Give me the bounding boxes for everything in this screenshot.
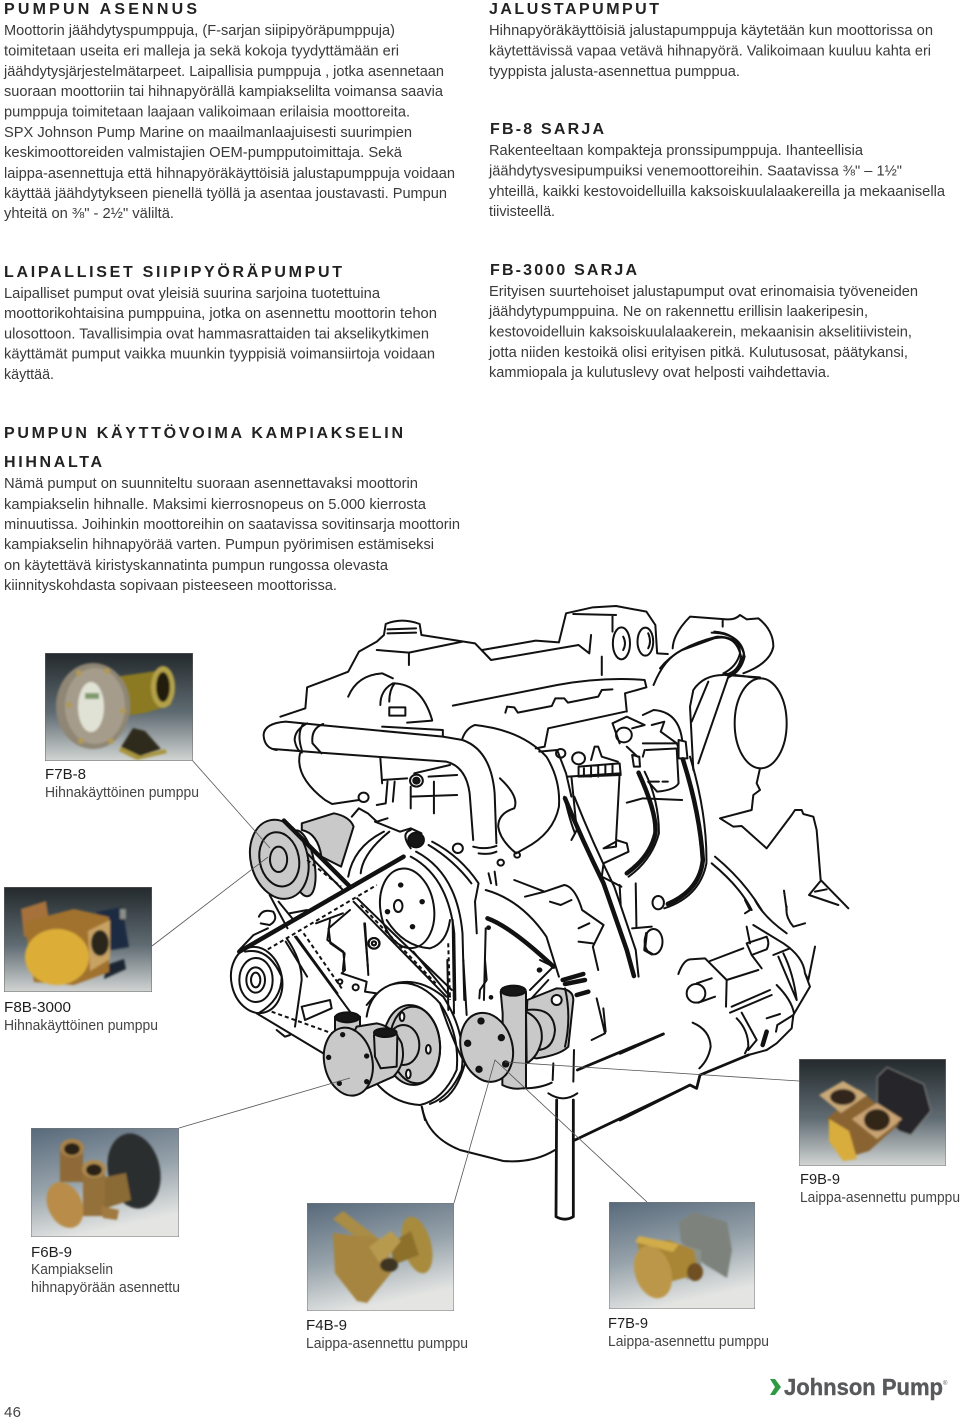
caption: F8B-3000 bbox=[4, 1000, 158, 1034]
caption: F6B-9: hihnapyörään asennettu bbox=[31, 1280, 180, 1296]
text block: pumpun käyttövoima: Nämä pumput on suunniteltu suoraan asennettavaksi moottorin bbox=[4, 476, 418, 492]
photo: F8B-3000 pump bbox=[4, 887, 152, 992]
section: laipalliset siipipyöräpumput bbox=[4, 262, 437, 383]
caption: F9B-9 bbox=[800, 1172, 960, 1206]
text block: pumpun asennus: toimitetaan useita eri malleja ja sekä kokoja tyydyttämään eri bbox=[4, 44, 399, 60]
heading: laipalliset siipipyöräpumput: LAIPALLISET SIIPIPYÖRÄPUMPUT bbox=[4, 262, 342, 281]
text block: laipalliset siipipyöräpumput: ulosottoon. Tavallisimpia ovat hammasrattaiden tai akselikytkimen bbox=[4, 326, 429, 342]
text block: pumpun asennus: käyttää jäähdytykseen pienellä työllä ja asentaa joustavasti. Pumpun bbox=[4, 186, 447, 202]
text block: laipalliset siipipyöräpumput bbox=[4, 286, 437, 383]
engine fuel filter and hoses bbox=[539, 710, 706, 977]
heading: pumpun käyttövoima kampiakselin hihnalta: PUMPUN KÄYTTÖVOIMA KAMPIAKSELIN bbox=[4, 423, 403, 442]
photo: F9B-9 pump bbox=[799, 1059, 946, 1166]
caption: F6B-9: Kampiakselin bbox=[31, 1262, 113, 1278]
caption: F7B-8 bbox=[45, 767, 199, 801]
text block: fb-3000 sarja: jotta niiden kestoikä olisi erityisen pitkä. Kulutusosat, päätykansi, bbox=[488, 345, 908, 361]
section: fb-3000 sarja bbox=[488, 262, 918, 381]
engine lower belt and crank pulleys bbox=[225, 920, 463, 1120]
section: jalustapumput bbox=[489, 1, 933, 80]
text block: fb-8 sarja: Rakenteeltaan kompakteja pronssipumppuja. Ihanteellisia bbox=[489, 143, 864, 159]
text block: laipalliset siipipyöräpumput: käyttämät pumput vaikka muunkin tyyppisiä voimansiirtoja voidaan bbox=[4, 346, 435, 362]
heading: pumpun asennus: PUMPUN ASENNUS bbox=[4, 1, 197, 18]
caption: F7B-8: Hihnakäyttöinen pumppu bbox=[45, 785, 199, 801]
engine line drawing bbox=[225, 606, 848, 1219]
section: pumpun asennus bbox=[3, 1, 455, 222]
text block: fb-3000 sarja: kestovoidelluin kaksoiskuulalaakerein, mekaanisin akselitiivistein, bbox=[489, 324, 912, 340]
text block: jalustapumput: Hihnapyöräkäyttöisiä jalustapumppuja käytetään kun moottorissa on bbox=[489, 23, 933, 39]
text block: fb-3000 sarja: jäähdytypumppuina. Ne on rakennettu erillisin laakeripesin, bbox=[488, 304, 868, 320]
leader lines bbox=[152, 760, 799, 1203]
photo: F4B-9 pump bbox=[307, 1203, 454, 1311]
text block: pumpun asennus: SPX Johnson Pump Marine on maailmanlaajuisesti suurimpien bbox=[4, 125, 412, 141]
engine flywheel section bbox=[620, 900, 815, 1120]
text block: pumpun käyttövoima: minuutissa. Joihinkin moottoreihin on saatavissa sovitinsarja moottorin bbox=[4, 517, 460, 533]
text block: laipalliset siipipyöräpumput: moottorikohtaisina pumppuina, jotka on asennettu moottorin tehon bbox=[4, 306, 437, 322]
text block: fb-3000 sarja: Erityisen suurtehoiset jalustapumput ovat erinomaisia työveneiden bbox=[489, 284, 918, 300]
photo: F7B-9 pump bbox=[609, 1202, 755, 1309]
caption: F7B-9: Laippa-asennettu pumppu bbox=[608, 1334, 769, 1350]
engine right pump and oil pan bbox=[422, 960, 680, 1219]
caption: F7B-9: F7B-9 bbox=[608, 1316, 648, 1332]
text block: pumpun asennus: pumppuja toimitetaan laajaan valikoimaan erilaisia moottoreita. bbox=[4, 104, 410, 120]
photo: F6B-9 pump bbox=[31, 1128, 179, 1237]
caption: F8B-3000: F8B-3000 bbox=[4, 1000, 71, 1016]
text block: pumpun asennus: suoraan moottoriin tai hihnapyörällä kampiakselilta voimansa saavia bbox=[4, 84, 444, 100]
caption: F8B-3000: Hihnakäyttöinen pumppu bbox=[4, 1018, 158, 1034]
section: pumpun käyttövoima kampiakselin hihnalta bbox=[4, 423, 460, 594]
heading: pumpun käyttövoima kampiakselin hihnalta: HIHNALTA bbox=[4, 454, 102, 471]
heading: pumpun käyttövoima kampiakselin hihnalta bbox=[4, 423, 403, 471]
text block: fb-3000 sarja: kammiopala ja kulutuslevy ovat helposti vaihdettavia. bbox=[489, 365, 830, 381]
caption: F9B-9: F9B-9 bbox=[800, 1172, 840, 1188]
registered mark: ® bbox=[943, 1380, 948, 1387]
text block: pumpun käyttövoima: kampiakselin hihnalle. Maksimi kierrosnopeus on 5.000 kierrosta bbox=[4, 497, 427, 513]
text block: pumpun asennus: keskimoottoreiden valmistajien OEM-pumpputoimittaja. Sekä bbox=[4, 145, 403, 161]
logo wordmark: Johnson Pump bbox=[784, 1374, 943, 1400]
text block: jalustapumput: tyyppista jalusta-asennettua pumppua. bbox=[489, 64, 740, 80]
engine upper section bbox=[239, 606, 760, 1000]
heading: fb-3000 sarja: FB-3000 SARJA bbox=[490, 262, 637, 279]
caption: F6B-9 bbox=[31, 1245, 180, 1296]
text block: pumpun käyttövoima bbox=[4, 476, 460, 594]
text block: fb-8 sarja: yhteillä, kaikki kestovoidelluilla kaksoiskuulalaakereilla ja mekaanisella bbox=[489, 184, 946, 200]
section: fb-8 sarja bbox=[488, 121, 946, 220]
text block: pumpun käyttövoima: kiinnityskohdasta sopivaan pisteeseen moottorissa. bbox=[4, 578, 337, 594]
caption: F7B-8: F7B-8 bbox=[45, 767, 86, 783]
icon: green chevron bbox=[770, 1379, 781, 1395]
photo: F7B-8 pump bbox=[45, 653, 193, 761]
text block: jalustapumput: käytettävissä vapaa vetävä hihnapyörä. Valikoimaan kuuluu kahta eri bbox=[489, 44, 931, 60]
text block: fb-8 sarja: tiivisteellä. bbox=[489, 204, 555, 220]
text block: pumpun asennus: Moottorin jäähdytyspumppuja, (F-sarjan siipipyöräpumppuja) bbox=[4, 23, 395, 39]
logo: Johnson Pump bbox=[770, 1374, 948, 1400]
text block: pumpun asennus: jäähdytysjärjestelmätarpeet. Laipallisia pumppuja , jotka asennetaan bbox=[3, 64, 444, 80]
engine right section bbox=[660, 615, 848, 910]
text block: pumpun asennus bbox=[3, 23, 455, 222]
text block: pumpun asennus: yhteitä on ⅜" - 2½" väliltä. bbox=[4, 206, 174, 222]
caption: F6B-9: F6B-9 bbox=[31, 1245, 72, 1261]
text block: pumpun käyttövoima: kampiakselin hihnapyörää varten. Pumpun pyörimisen estämiseksi bbox=[4, 537, 434, 553]
text block: fb-8 sarja bbox=[488, 143, 946, 220]
caption: F4B-9: F4B-9 bbox=[306, 1318, 347, 1334]
text block: pumpun asennus: laippa-asennettuja että hihnapyöräkäyttöisiä jalustapumppuja voidaan bbox=[4, 166, 455, 182]
text block: pumpun käyttövoima: on käytettävä kiristyskannatinta pumpun rungossa olevasta bbox=[4, 558, 389, 574]
text block: fb-8 sarja: jäähdytysvesipumpuiksi venemoottoreihin. Saatavissa ⅜" – 1½" bbox=[488, 164, 902, 180]
caption: F4B-9: Laippa-asennettu pumppu bbox=[306, 1336, 468, 1352]
caption: F4B-9 bbox=[306, 1318, 468, 1352]
caption: F7B-9 bbox=[608, 1316, 769, 1350]
text block: laipalliset siipipyöräpumput: Laipalliset pumput ovat yleisiä suurina sarjoina tuotettuina bbox=[4, 286, 381, 302]
heading: fb-8 sarja: FB-8 SARJA bbox=[490, 121, 604, 138]
text block: jalustapumput bbox=[489, 23, 933, 80]
heading: jalustapumput: JALUSTAPUMPUT bbox=[489, 1, 659, 18]
text block: laipalliset siipipyöräpumput: käyttää. bbox=[4, 367, 54, 383]
text block: fb-3000 sarja bbox=[488, 284, 918, 381]
